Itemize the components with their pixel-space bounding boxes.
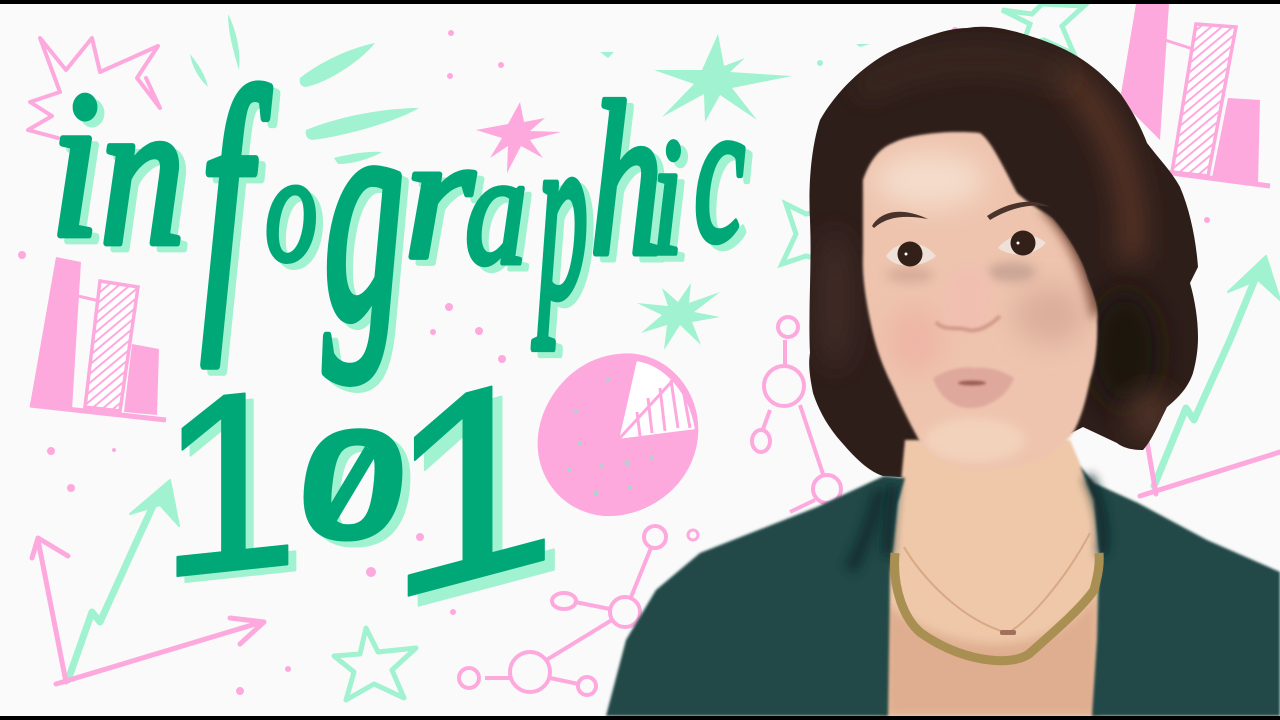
title: infographic: i bbox=[50, 49, 100, 281]
title: infographic shadow bbox=[57, 34, 752, 390]
title: infographic shadow: i bbox=[57, 55, 107, 287]
title: infographic shadow: p bbox=[539, 85, 595, 356]
number 101: 0 bbox=[286, 396, 420, 575]
title: infographic shadow: f bbox=[208, 34, 278, 372]
icon: mint star burst top bbox=[654, 34, 792, 122]
title: infographic: f bbox=[201, 28, 271, 366]
icon: star outline top right bbox=[1002, 4, 1084, 54]
eye right bbox=[998, 230, 1046, 256]
icon: pink star burst bbox=[476, 102, 561, 173]
hair bbox=[809, 26, 1198, 478]
bottom letterbox bbox=[0, 716, 1280, 720]
top letterbox bbox=[0, 0, 1280, 4]
title: infographic shadow: r bbox=[411, 103, 482, 302]
pendant bbox=[1000, 630, 1016, 635]
number 101: 0 bbox=[294, 402, 428, 581]
title: infographic: h bbox=[590, 58, 662, 301]
mouth opening bbox=[958, 380, 986, 386]
eyebrow right bbox=[987, 202, 1050, 220]
mouth bbox=[933, 367, 1014, 408]
nose bbox=[936, 316, 1000, 330]
line chart bottom left bbox=[32, 480, 264, 684]
number 101: 1 bbox=[395, 320, 569, 670]
mint dots bbox=[600, 44, 870, 66]
face tones bbox=[875, 152, 1110, 462]
title: infographic: o bbox=[265, 122, 317, 294]
title: infographic: g bbox=[324, 41, 404, 384]
bar chart left bbox=[30, 257, 166, 420]
title: infographic: i bbox=[652, 103, 683, 290]
neck and chest bbox=[880, 440, 1100, 716]
bar chart top right bbox=[1120, 4, 1270, 186]
number 101 bbox=[158, 310, 569, 670]
number 101: 1 bbox=[166, 340, 308, 639]
title: infographic: a bbox=[465, 121, 527, 299]
title: infographic: n bbox=[100, 57, 185, 289]
lower chest tone bbox=[885, 590, 1098, 716]
cardigan bbox=[606, 466, 1280, 716]
title: infographic bbox=[50, 28, 745, 384]
network diagram right bbox=[752, 317, 841, 512]
title: infographic shadow: c bbox=[701, 63, 752, 290]
icon: mint star burst middle bbox=[637, 283, 720, 350]
pie chart bbox=[538, 353, 698, 516]
thin necklace bbox=[904, 533, 1090, 633]
title: infographic: c bbox=[694, 57, 745, 284]
title: infographic shadow: a bbox=[472, 127, 534, 305]
accent strokes around title bbox=[190, 14, 419, 164]
icon: spiky burst top left bbox=[28, 38, 160, 138]
line chart right bbox=[1140, 256, 1280, 496]
number 101: 1 bbox=[158, 334, 300, 633]
network diagram bottom bbox=[459, 526, 698, 695]
title: infographic: r bbox=[404, 97, 475, 296]
title: infographic shadow: i bbox=[659, 109, 690, 296]
person bbox=[606, 10, 1280, 716]
eye left bbox=[886, 242, 936, 266]
title: infographic shadow: o bbox=[272, 128, 324, 300]
icon: star outline mid bbox=[782, 204, 830, 264]
title: infographic: p bbox=[532, 79, 588, 350]
icon: star outline bottom bbox=[334, 628, 416, 700]
title: infographic shadow: h bbox=[597, 64, 669, 307]
eyebrow left bbox=[872, 212, 928, 228]
title: infographic shadow: n bbox=[107, 63, 192, 295]
cardigan shading bbox=[850, 476, 1103, 570]
title: infographic shadow: g bbox=[331, 47, 411, 390]
number 101: 1 bbox=[385, 310, 559, 660]
face bbox=[863, 132, 1097, 471]
gold collar necklace bbox=[895, 553, 1099, 661]
